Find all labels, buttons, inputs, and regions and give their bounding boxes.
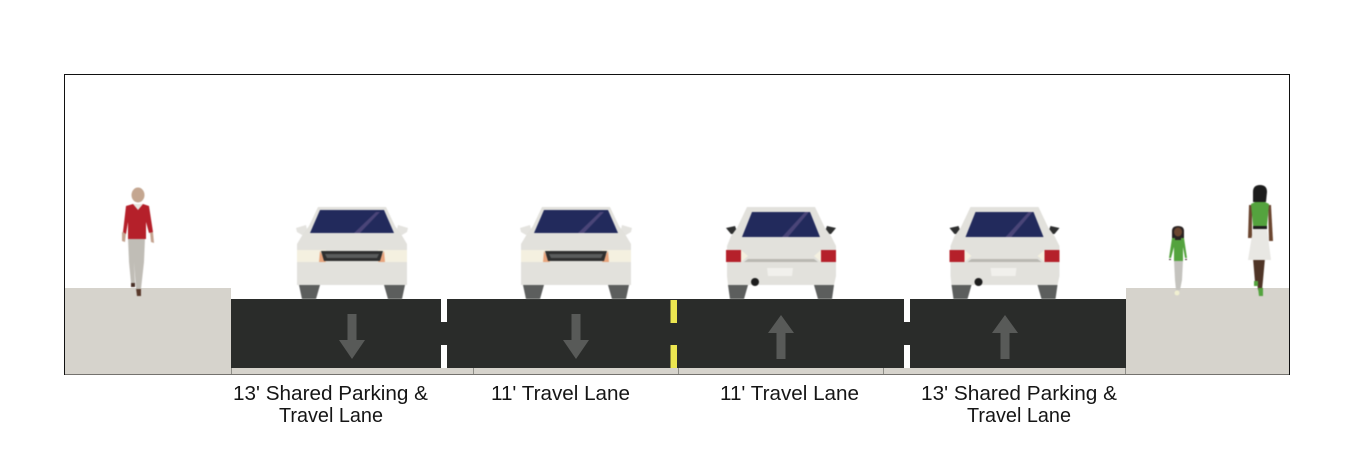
car: front view, travel lane xyxy=(520,207,632,299)
lane divider: left white dashes xyxy=(441,299,447,368)
label: left travel lane: 11' Travel Lane xyxy=(491,382,630,405)
center line: yellow dashes xyxy=(670,300,677,368)
left sidewalk xyxy=(65,288,231,374)
arrow: down, parking lane xyxy=(339,314,365,359)
arrow: up, travel lane xyxy=(768,315,794,359)
label: right shared parking and travel lane xyxy=(921,382,1117,427)
car: rear view, parking lane xyxy=(950,207,1060,299)
curb strip xyxy=(231,368,1126,374)
lane divider: right white dashes xyxy=(904,299,910,368)
arrow: up, parking lane xyxy=(992,315,1018,359)
arrow: down, travel lane xyxy=(563,314,589,359)
label: left shared parking and travel lane xyxy=(233,382,428,427)
roadway xyxy=(231,299,1126,368)
pedestrian: child in green shirt xyxy=(1169,226,1187,296)
pedestrian: woman in green top and white skirt xyxy=(1248,185,1273,296)
label: right shared parking and travel lane: 13' Shared Parking & xyxy=(921,382,1117,405)
label: right shared parking and travel lane: Travel Lane xyxy=(967,404,1071,427)
pedestrian: man in red sweater xyxy=(122,188,154,296)
label: right travel lane: 11' Travel Lane xyxy=(720,382,859,405)
car: rear view, travel lane xyxy=(726,207,836,299)
label: left shared parking and travel lane: Travel Lane xyxy=(279,404,383,427)
diagram frame xyxy=(64,74,1290,374)
right sidewalk xyxy=(1126,288,1289,374)
car: front view, parking lane xyxy=(296,207,408,299)
label: left shared parking and travel lane: 13' Shared Parking & xyxy=(233,382,428,405)
